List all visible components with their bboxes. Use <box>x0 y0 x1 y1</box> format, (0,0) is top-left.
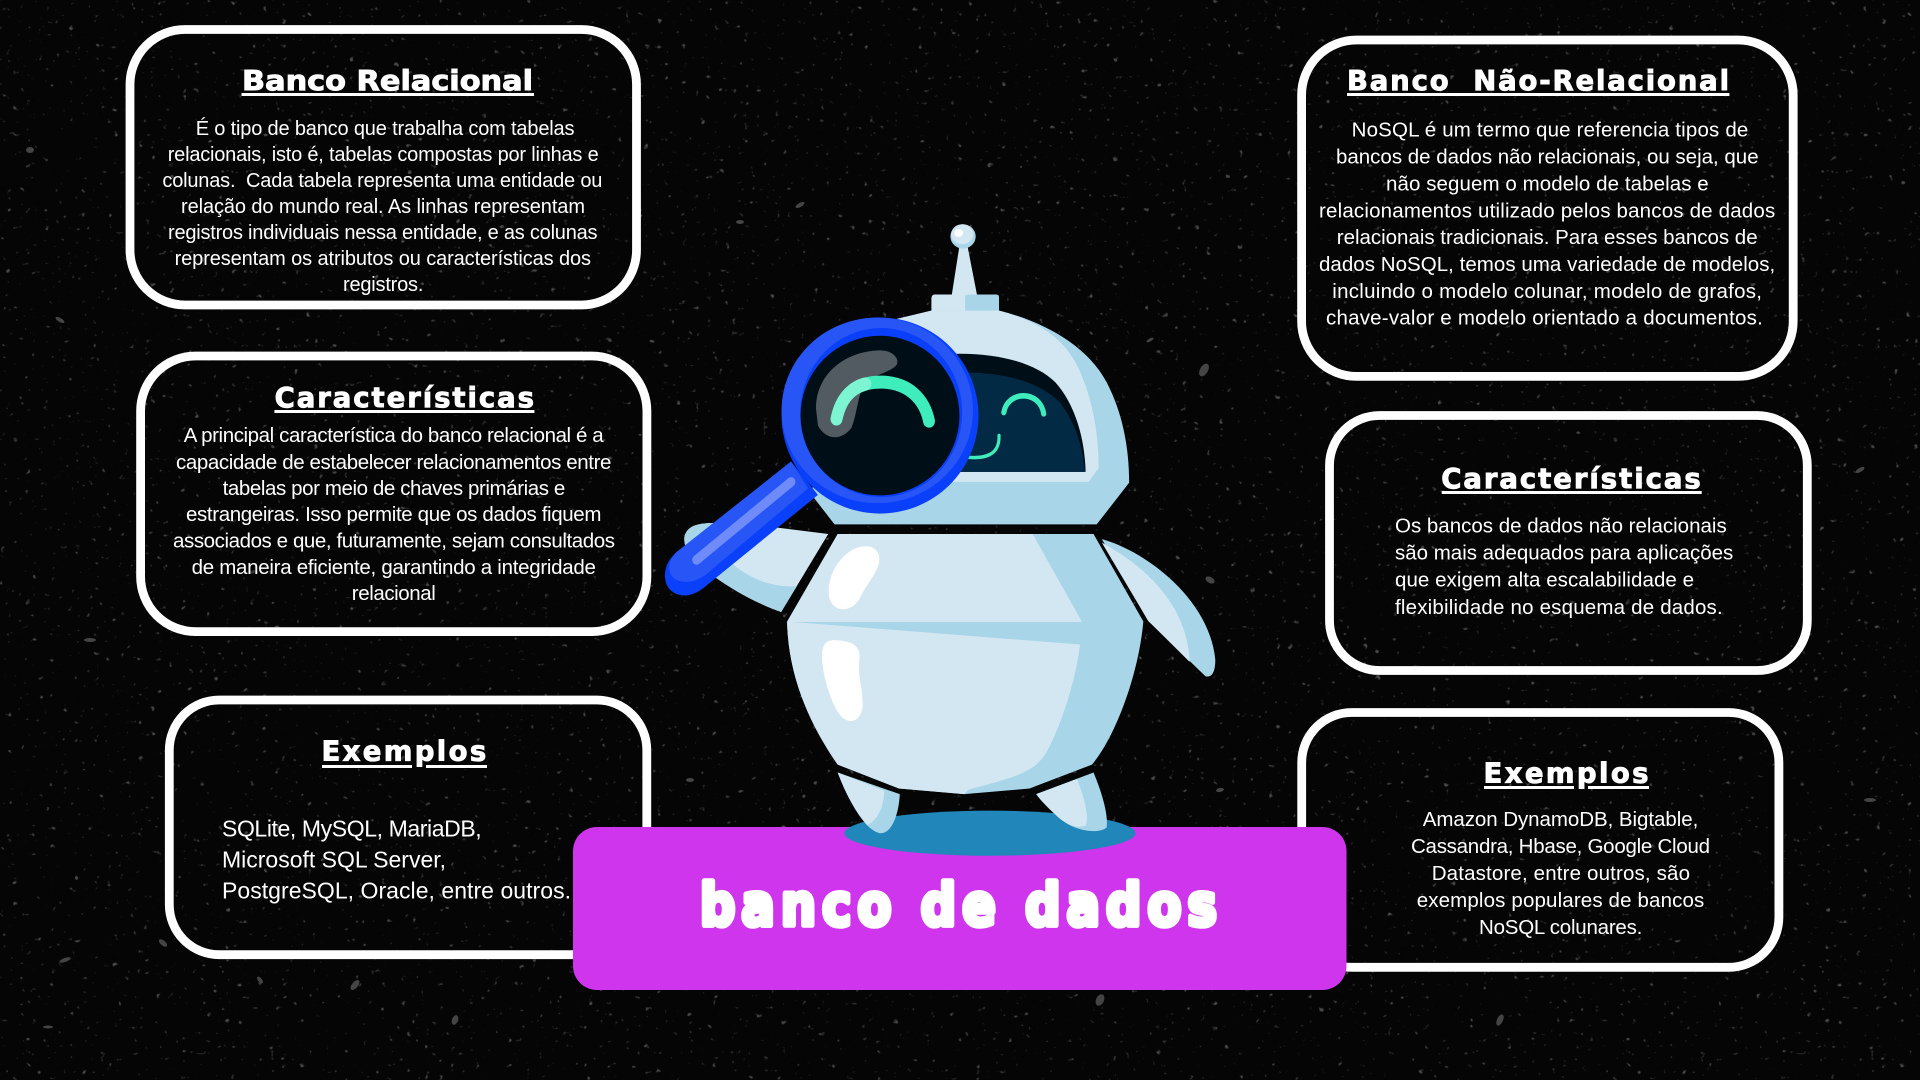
robot legs <box>838 772 1107 833</box>
panel: Banco Nao-Relacional <box>1302 40 1793 376</box>
text block: exemplos NoSQL: Datastore, entre outros, são <box>1432 862 1690 885</box>
text block: definicao NoSQL: dados NoSQL, temos uma variedade de modelos, <box>1319 253 1775 276</box>
heading: Exemplos: Exemplos <box>1484 757 1648 789</box>
text block: definicao NoSQL: não seguem o modelo de tabelas e <box>1386 172 1709 195</box>
text block: definicao relacional: representam os atributos ou características dos <box>175 248 591 270</box>
text block: exemplos relacional: Microsoft SQL Server, <box>222 847 446 873</box>
panel: Caracteristicas relacional <box>141 356 647 632</box>
text block: caracteristicas relacional <box>173 424 615 605</box>
magnifying glass <box>665 318 978 596</box>
robot shadow <box>844 811 1135 856</box>
text block: definicao relacional <box>162 117 602 296</box>
panel: Banco Relacional <box>130 30 636 305</box>
text block: exemplos relacional: SQLite, MySQL, MariaDB, <box>222 816 482 842</box>
text block: caracteristicas relacional: tabelas por meio de chaves primárias e <box>223 477 565 500</box>
heading: Caracteristicas: Características <box>1441 463 1701 495</box>
robot left arm <box>684 523 828 612</box>
text block: exemplos relacional: PostgreSQL, Oracle, entre outros. <box>222 877 571 903</box>
text block: caracteristicas relacional: capacidade de estabelecer relacionamentos entre <box>176 451 611 474</box>
title banner <box>573 827 1346 990</box>
panel: Exemplos relacional <box>169 700 647 955</box>
robot right arm <box>1102 539 1215 677</box>
title: banco de dados <box>700 871 1217 939</box>
heading: Banco Nao-Relacional: Banco Não-Relacional <box>1347 65 1729 97</box>
text block: definicao NoSQL: incluindo o modelo colunar, modelo de grafos, <box>1332 280 1762 303</box>
text block: exemplos relacional <box>222 816 571 903</box>
text block: definicao relacional: É o tipo de banco que trabalha com tabelas <box>196 117 574 140</box>
text block: definicao NoSQL: relacionamentos utilizado pelos bancos de dados <box>1319 199 1775 222</box>
text block: caracteristicas nao relacional: Os bancos de dados não relacionais <box>1395 514 1727 537</box>
text block: caracteristicas nao relacional: flexibilidade no esquema de dados. <box>1395 596 1723 619</box>
text block: caracteristicas nao relacional: que exigem alta escalabilidade e <box>1395 569 1694 592</box>
robot head <box>810 311 1129 524</box>
text block: caracteristicas relacional: associados e que, futuramente, sejam consultados <box>173 529 615 552</box>
robot body <box>787 534 1143 794</box>
text block: definicao relacional: registros. <box>343 274 423 296</box>
text block: definicao relacional: relacionais, isto é, tabelas compostas por linhas e <box>168 144 599 166</box>
panel: Exemplos nao relacional <box>1302 712 1779 967</box>
text block: exemplos NoSQL: Amazon DynamoDB, Bigtable, <box>1423 808 1698 831</box>
text block: definicao NoSQL: chave-valor e modelo orientado a documentos. <box>1326 307 1763 330</box>
text block: caracteristicas relacional: A principal característica do banco relacional é a <box>184 424 604 447</box>
text block: exemplos NoSQL <box>1411 808 1710 939</box>
text block: definicao NoSQL: bancos de dados não relacionais, ou seja, que <box>1336 145 1759 168</box>
heading: Banco Relacional: Banco Relacional <box>242 65 533 97</box>
text block: caracteristicas relacional: estrangeiras. Isso permite que os dados fiquem <box>186 503 601 526</box>
text block: caracteristicas nao relacional <box>1395 514 1733 619</box>
text block: definicao relacional: colunas. Cada tabela representa uma entidade ou <box>162 170 602 192</box>
heading: Caracteristicas: Características <box>275 382 534 414</box>
panel: Caracteristicas nao relacional <box>1330 416 1807 670</box>
text block: definicao NoSQL: relacionais tradicionais. Para esses bancos de <box>1337 226 1758 249</box>
illustration: robot with magnifying glass <box>665 224 1215 856</box>
text block: definicao NoSQL <box>1319 118 1775 330</box>
robot antenna <box>931 224 999 314</box>
text block: caracteristicas nao relacional: são mais adequados para aplicações <box>1395 541 1733 564</box>
text block: definicao NoSQL: NoSQL é um termo que referencia tipos de <box>1352 118 1748 141</box>
text block: caracteristicas relacional: relacional <box>352 582 436 605</box>
heading: Exemplos: Exemplos <box>322 736 486 768</box>
text block: exemplos NoSQL: NoSQL colunares. <box>1479 916 1642 939</box>
text block: definicao relacional: relação do mundo real. As linhas representam <box>181 196 585 218</box>
text block: exemplos NoSQL: Cassandra, Hbase, Google Cloud <box>1411 835 1710 858</box>
text block: exemplos NoSQL: exemplos populares de bancos <box>1417 889 1704 912</box>
text block: caracteristicas relacional: de maneira eficiente, garantindo a integridade <box>192 556 596 579</box>
text block: definicao relacional: registros individuais nessa entidade, e as colunas <box>168 222 598 244</box>
